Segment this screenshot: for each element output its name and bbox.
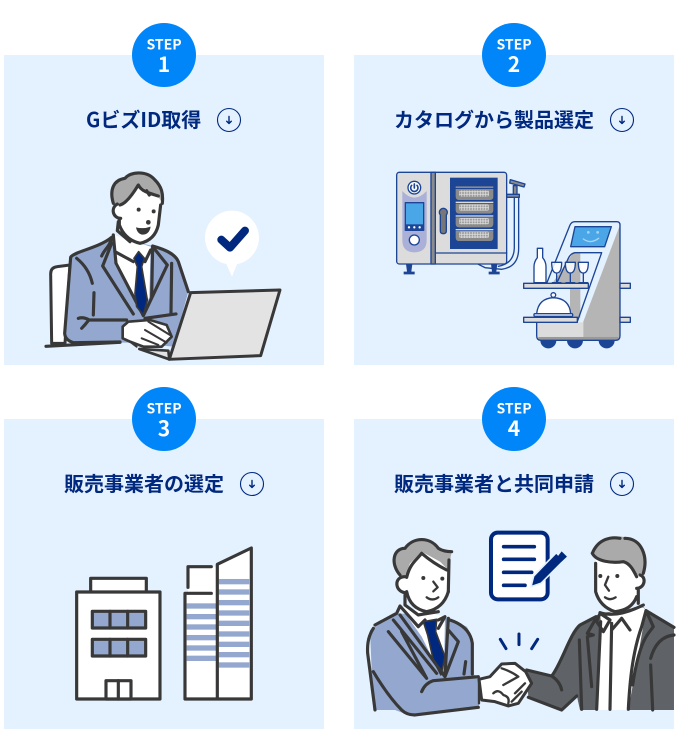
- body: [397, 172, 507, 264]
- window and trays: [450, 178, 498, 249]
- icon: down arrow: [240, 472, 264, 496]
- base and column: [537, 322, 583, 340]
- illustration: businessman at laptop: [46, 173, 280, 359]
- icon: down arrow: [610, 472, 634, 496]
- desk line: [46, 342, 120, 346]
- control panel: [402, 191, 427, 252]
- panel: step 4: [354, 387, 674, 729]
- icon: down arrow: [218, 108, 240, 132]
- illustration: serving robot: [524, 222, 630, 348]
- illustration: handshake: [368, 533, 674, 715]
- hands: [123, 320, 172, 347]
- low-rise building: [77, 578, 160, 699]
- hose: [478, 198, 519, 269]
- heading: step 3: 販売事業者の選定: [64, 468, 224, 497]
- cloche: [551, 293, 556, 297]
- handle: [439, 208, 447, 234]
- shelves: [524, 283, 630, 322]
- screen: [571, 227, 611, 247]
- right man torso: [527, 605, 674, 710]
- illustration: buildings: [77, 548, 251, 699]
- panel: step 3: [4, 387, 324, 729]
- document and pen icon: [491, 533, 567, 599]
- heading: step 2: カタログから製品選定: [394, 104, 594, 133]
- panel: step 2: [354, 23, 674, 365]
- badge: step 1: [132, 23, 196, 87]
- speech bubble with check: [205, 211, 259, 277]
- nozzle: [507, 186, 519, 197]
- glasses: [552, 262, 588, 283]
- high-rise building: [185, 548, 251, 699]
- laptop: [139, 349, 169, 359]
- badge: step 2: STEP: [496, 34, 532, 54]
- icon: down arrow: [610, 108, 634, 132]
- spark lines: [500, 634, 538, 649]
- left man: [368, 540, 479, 715]
- panel: step 1: [4, 23, 324, 365]
- badge: step 1: 1: [158, 49, 170, 79]
- right man head: [592, 536, 645, 612]
- frame: [537, 222, 620, 340]
- chair: [51, 265, 70, 343]
- heading: step 4: 販売事業者と共同申請: [394, 468, 594, 497]
- illustration: oven: [397, 172, 525, 274]
- bottle: [534, 248, 546, 283]
- badge: step 1: STEP: [146, 34, 182, 54]
- suit: [65, 237, 188, 347]
- clasped hands: [479, 663, 532, 706]
- badge: step 3: STEP: [146, 398, 182, 418]
- head: [119, 182, 162, 243]
- badge: step 4: STEP: [496, 398, 532, 418]
- badge: step 3: 3: [158, 413, 170, 443]
- badge: step 3: [132, 387, 196, 451]
- badge: step 4: 4: [508, 413, 520, 443]
- legs: [404, 264, 500, 274]
- badge: step 4: [482, 387, 546, 451]
- heading: step 1: GビズID取得: [86, 104, 201, 133]
- wheels: [540, 332, 556, 348]
- badge: step 2: 2: [508, 49, 520, 79]
- badge: step 2: [482, 23, 546, 87]
